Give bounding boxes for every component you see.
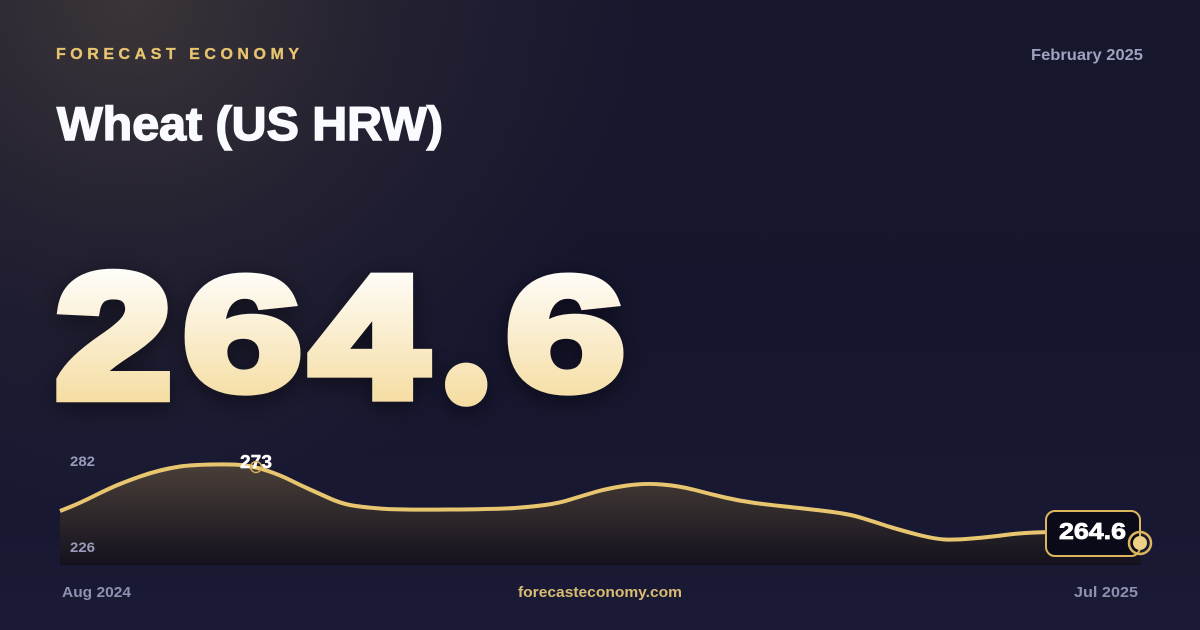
latest marker	[1129, 532, 1151, 554]
headline value: 2	[56, 238, 171, 434]
chart line	[60, 464, 1050, 540]
peak value label: 273	[240, 452, 272, 472]
latest value callout: 264.6	[1059, 518, 1126, 544]
headline value: .	[431, 172, 501, 462]
start date label: Aug 2024	[62, 584, 132, 601]
axis max label: 282	[70, 453, 95, 469]
axis min label: 226	[70, 539, 95, 555]
headline value	[56, 172, 625, 462]
brand label: FORECAST ECONOMY	[56, 46, 299, 63]
headline value: 6	[182, 244, 302, 424]
headline value: 6	[506, 244, 625, 424]
peak marker	[250, 462, 262, 472]
line chart	[60, 452, 1151, 565]
latest value callout	[1046, 511, 1140, 556]
headline value: 4	[311, 242, 426, 433]
title: Wheat (US HRW)	[57, 97, 443, 150]
date: February 2025	[1031, 47, 1143, 64]
website: forecasteconomy.com	[518, 584, 682, 601]
chart area fill	[60, 464, 1141, 565]
end date label: Jul 2025	[1074, 584, 1138, 601]
